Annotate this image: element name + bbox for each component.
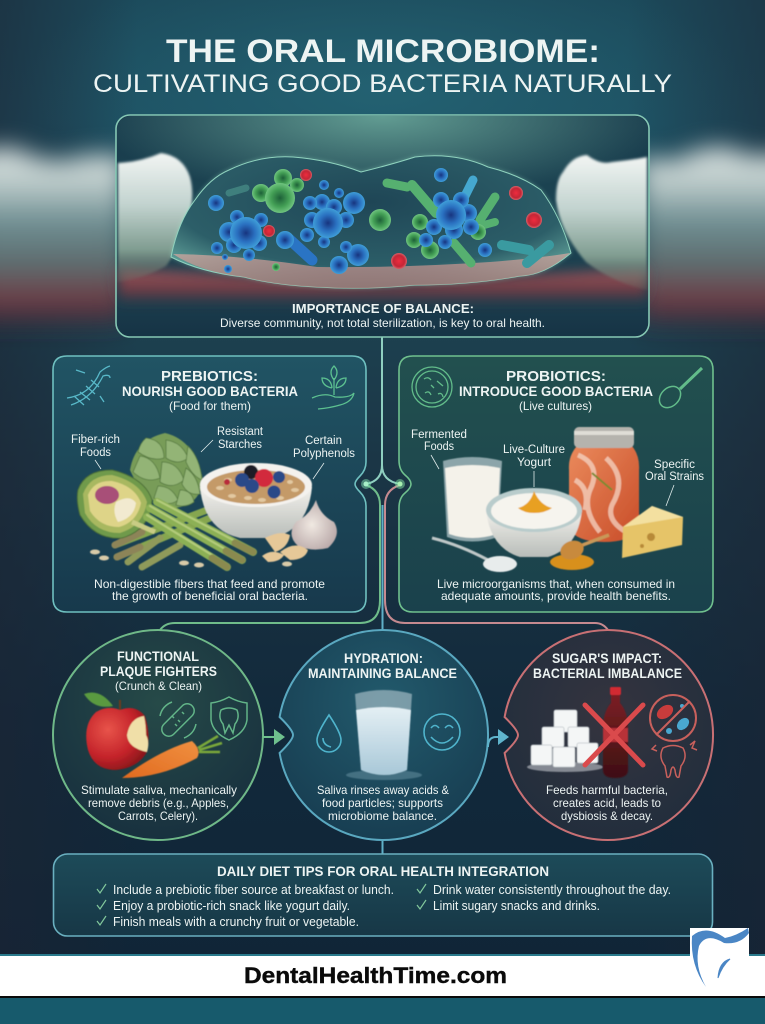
- frame: [116, 115, 649, 337]
- honey dipper: [550, 535, 609, 570]
- icon: red cross: [585, 705, 643, 765]
- heading: prebiotics: NOURISH GOOD BACTERIA: [122, 383, 298, 399]
- heading: functional plaque fighters: [100, 648, 217, 693]
- panel: hydration: [280, 630, 488, 840]
- heading: probiotics: PROBIOTICS:: [506, 368, 606, 385]
- labels: probiotic foods: Oral Strains: [645, 471, 704, 483]
- labels: prebiotic foods: Foods: [80, 447, 111, 459]
- heading: prebiotics: [122, 368, 298, 413]
- heading: probiotics: (Live cultures): [519, 399, 592, 413]
- text: probiotics description: Live microorganisms that, when consumed in: [437, 577, 675, 591]
- blue bacteria: [208, 168, 492, 274]
- glass of milk: [443, 457, 502, 542]
- icon: dna: [67, 366, 110, 405]
- icon: water drop: [317, 715, 341, 752]
- panel: daily diet tips: [54, 854, 712, 936]
- heading: sugar's impact: [533, 650, 682, 681]
- checklist: left column: Include a prebiotic fiber source at breakfast or lunch.: [113, 883, 394, 897]
- biofilm illustration: [171, 156, 571, 288]
- icon: spoon: [655, 368, 702, 412]
- spoon: [432, 538, 517, 572]
- icon: tooth shield: [211, 697, 247, 740]
- labels: probiotic foods: Foods: [424, 441, 454, 453]
- panel: prebiotics: [53, 356, 366, 612]
- title: CULTIVATING GOOD BACTERIA NATURALLY: [93, 70, 672, 98]
- bacteria rods: [229, 180, 549, 263]
- text: functional description: Carrots, Celery).: [118, 809, 198, 823]
- connector nodes: [361, 479, 405, 489]
- panel: sugar's impact: [505, 630, 713, 840]
- labels: prebiotic foods: [71, 426, 355, 479]
- asparagus back: [115, 510, 210, 567]
- checklist: left column: Finish meals with a crunchy fruit or vegetable.: [113, 915, 359, 929]
- icon: right tooth: [556, 155, 647, 290]
- icon: glass of water: [346, 690, 422, 780]
- labels: probiotic foods: Fermented: [411, 429, 467, 441]
- heading: hydration: [308, 650, 457, 681]
- jar of kimchi: [569, 427, 639, 542]
- text: prebiotics description: Non-digestible fibers that feed and promote: [94, 577, 325, 591]
- heading: probiotics: INTRODUCE GOOD BACTERIA: [459, 383, 653, 399]
- green bacteria: [252, 169, 486, 271]
- icon: aching tooth: [652, 741, 697, 777]
- labels: prebiotic foods: Resistant: [217, 426, 264, 438]
- icon: carrot: [122, 736, 222, 778]
- labels: prebiotic foods: Fiber-rich: [71, 434, 120, 446]
- garlic: [262, 500, 337, 562]
- cut artichoke: [77, 470, 155, 538]
- checklist: right column: Limit sugary snacks and drinks.: [433, 899, 600, 913]
- text: functional description: remove debris (e.g., Apples,: [88, 796, 229, 810]
- text: functional description: [81, 783, 237, 823]
- blurred mouth backdrop: [0, 147, 765, 322]
- text: probiotics description: adequate amounts, provide health benefits.: [441, 589, 671, 603]
- footer website: DentalHealthTime.com: [244, 963, 507, 988]
- heading: importance of balance: IMPORTANCE OF BALANCE:: [292, 301, 474, 316]
- asparagus front: [147, 500, 253, 567]
- heading: sugar's impact: BACTERIAL IMBALANCE: [533, 665, 682, 681]
- arrow: functional to hydration: [263, 729, 285, 745]
- panel: probiotics: [399, 356, 713, 612]
- red bacteria: [263, 169, 542, 269]
- gums: [118, 268, 647, 304]
- checklist: right column: [417, 883, 671, 913]
- text: sugar description: creates acid, leads to: [553, 796, 661, 810]
- labels: prebiotic foods: Starches: [218, 439, 262, 451]
- heading: hydration: MAINTAINING BALANCE: [308, 665, 457, 681]
- text: hydration description: microbiome balance.: [328, 809, 437, 823]
- heading: probiotics: [459, 368, 653, 413]
- heading: hydration: HYDRATION:: [344, 650, 423, 666]
- text: hydration description: [317, 783, 449, 823]
- seeds: [90, 550, 292, 568]
- text: sugar description: [546, 783, 668, 823]
- bowl of yogurt: [486, 488, 582, 557]
- panel: functional plaque fighters: [53, 630, 263, 840]
- text: prebiotics description: the growth of beneficial oral bacteria.: [112, 589, 308, 603]
- labels: prebiotic foods: Certain: [305, 435, 342, 447]
- icon: sugar cubes: [527, 710, 603, 772]
- connector lines: [160, 337, 608, 854]
- heading: prebiotics: (Food for them): [169, 399, 251, 413]
- cheese: [622, 506, 683, 558]
- labels: prebiotic foods: Polyphenols: [293, 448, 355, 460]
- text: sugar description: Feeds harmful bacteria,: [546, 783, 668, 797]
- icon: left tooth: [118, 153, 192, 282]
- heading: daily diet tips: DAILY DIET TIPS FOR ORAL HEALTH INTEGRATION: [217, 864, 549, 879]
- heading: functional plaque fighters: FUNCTIONAL: [117, 648, 199, 664]
- icon: no bacteria: [650, 695, 696, 741]
- checklist: right column: Drink water consistently throughout the day.: [433, 883, 671, 897]
- text: hydration description: Saliva rinses away acids &: [317, 783, 449, 797]
- labels: probiotic foods: Specific: [654, 459, 695, 471]
- illustration: prebiotic foods: [77, 433, 337, 568]
- labels: probiotic foods: [411, 429, 704, 506]
- title: THE ORAL MICROBIOME:: [166, 33, 600, 69]
- text: prebiotics description: [94, 577, 325, 603]
- text: functional description: Stimulate saliva, mechanically: [81, 783, 237, 797]
- arrow: hydration to sugar: [488, 729, 509, 747]
- heading: sugar's impact: SUGAR'S IMPACT:: [552, 650, 662, 666]
- text: hydration description: food particles; supports: [322, 796, 443, 810]
- title: [93, 33, 672, 98]
- text: sugar description: dysbiosis & decay.: [561, 809, 653, 823]
- bowl of oats: [200, 463, 312, 538]
- illustration: probiotic foods: [432, 427, 683, 572]
- icon: apple: [84, 692, 149, 770]
- checklist: left column: Enjoy a probiotic-rich snack like yogurt daily.: [113, 899, 350, 913]
- icon: petri dish: [412, 367, 452, 407]
- heading: functional plaque fighters: PLAQUE FIGHTERS: [100, 663, 217, 679]
- icon: soda bottle: [603, 687, 628, 778]
- labels: probiotic foods: Live-Culture: [503, 444, 565, 456]
- icon: smiley: [424, 714, 460, 750]
- checklist: left column: [97, 883, 394, 929]
- icon: plant in hand: [312, 366, 354, 409]
- icon: bacteria scrubbing: [159, 701, 197, 739]
- text: probiotics description: [437, 577, 675, 603]
- text: importance description: Diverse community, not total sterilization, is key to oral health.: [220, 316, 545, 330]
- panel: importance of balance: [116, 115, 649, 337]
- labels: probiotic foods: Yogurt: [517, 457, 552, 469]
- heading: functional plaque fighters: (Crunch & Clean): [115, 679, 202, 693]
- whole artichoke: [130, 433, 203, 508]
- logo: tooth: [690, 928, 749, 987]
- footer band: [0, 954, 765, 1024]
- heading: prebiotics: PREBIOTICS:: [161, 368, 258, 385]
